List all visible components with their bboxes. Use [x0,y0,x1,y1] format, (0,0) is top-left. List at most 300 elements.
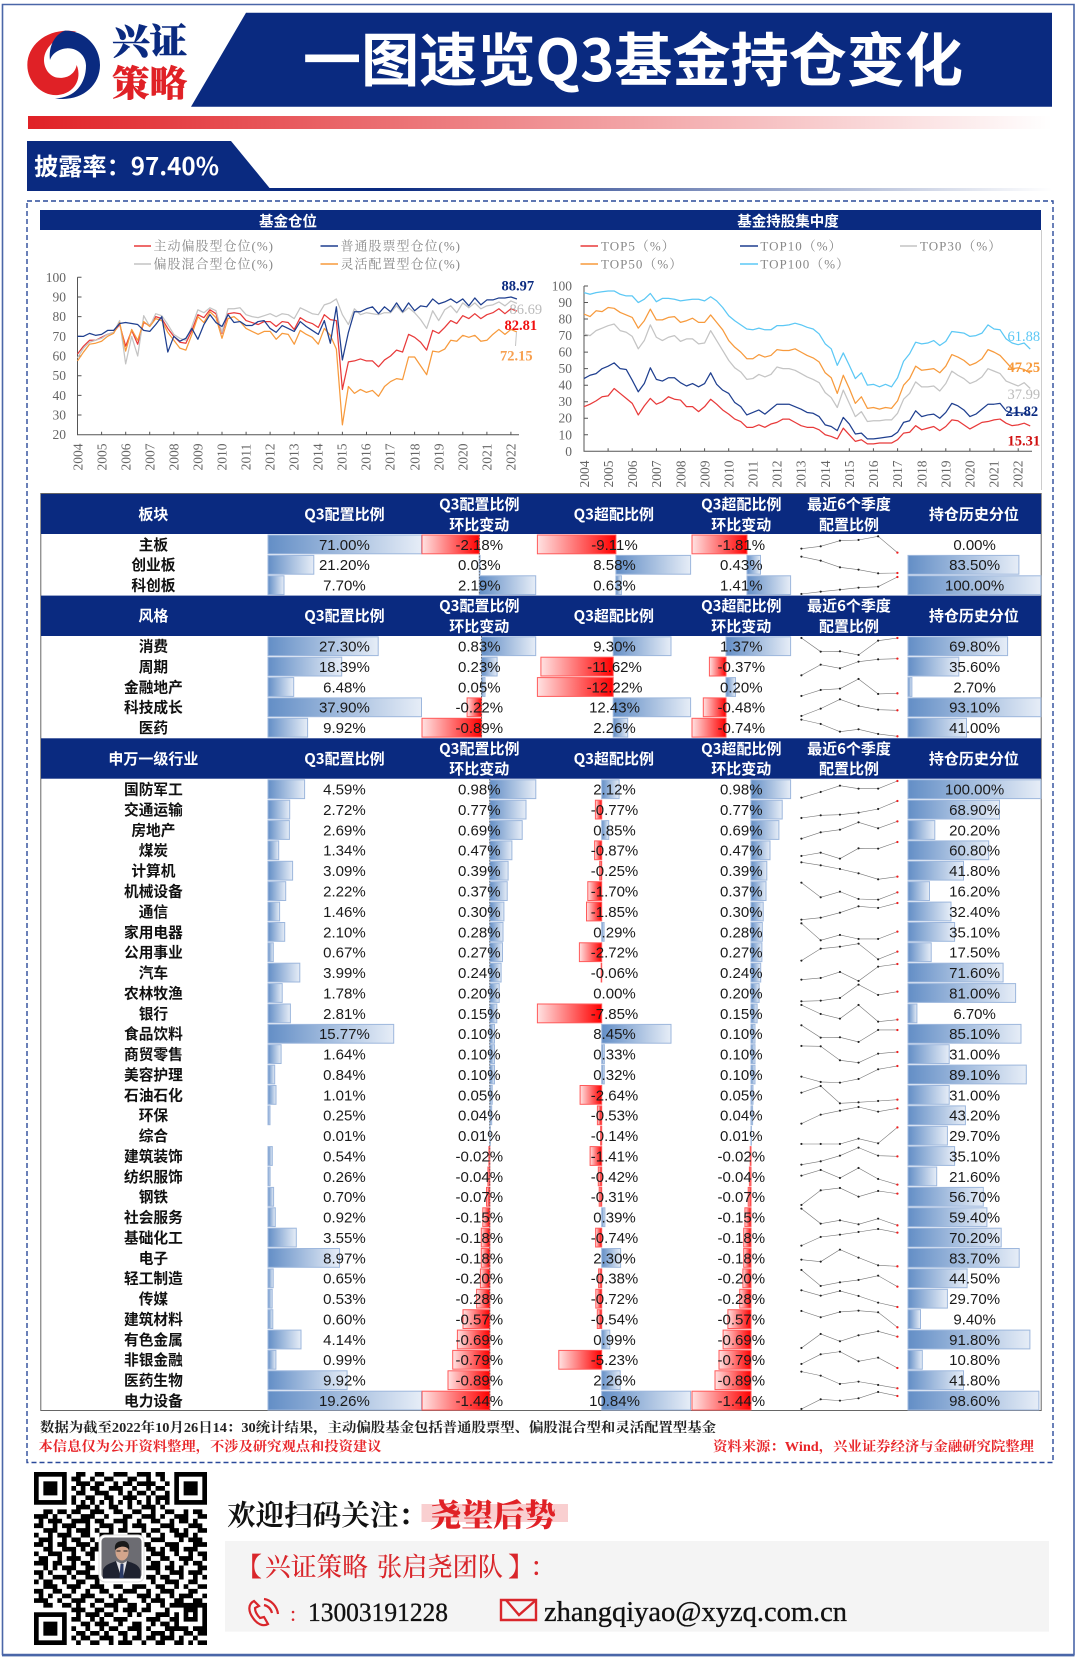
row: 通信: 32.40% [949,904,1000,921]
row: 美容护理: 89.10% [949,1067,1000,1084]
row: 消费: 1.37% [720,639,763,656]
axes: 2022 [504,444,518,470]
phone number: 13003191228 [308,1598,448,1627]
row: 综合: 29.70% [949,1128,1000,1145]
row: 主板 [139,534,996,555]
table header: 板块: Q3配置比例 [439,494,520,514]
axes: 2020 [456,443,470,470]
row: 机械设备: 2.22% [323,884,366,900]
table header: 板块: Q3配置比例 [304,504,385,524]
table header: 申万一级行业: 持仓历史分位 [929,748,1019,769]
row: 环保: 43.20% [949,1108,1000,1125]
team name: ： [530,1553,556,1582]
row: 基础化工: 基础化工 [124,1227,183,1248]
row: 钢铁: -0.07% [718,1189,765,1206]
row: 公用事业: 0.27% [458,945,501,962]
row: 建筑装饰: -1.41% [591,1148,638,1165]
row: 医药: 9.92% [323,720,366,737]
row: 农林牧渔: 81.00% [949,985,1000,1002]
row: 煤炭: 1.34% [323,843,366,860]
row: 美容护理: 美容护理 [124,1064,183,1085]
contact panel [225,1541,1049,1632]
row: 科技成长: -0.48% [718,700,765,717]
axes: 90 [558,295,572,310]
row: 计算机: 0.39% [720,863,763,880]
row: 医药 [139,717,1000,738]
row: 商贸零售: 商贸零售 [124,1044,183,1064]
axes: 2019 [432,443,446,470]
row: 房地产: 2.69% [323,822,366,839]
axes: 20 [52,427,66,442]
row: 通信 [139,901,1000,922]
row: 家用电器: 2.10% [323,924,366,941]
row: 钢铁: 56.70% [949,1189,1000,1206]
row: 消费: 27.30% [319,639,370,656]
row: 主板: -1.81% [718,537,765,554]
row: 环保 [139,1105,1000,1126]
row: 煤炭: 煤炭 [139,840,168,861]
axes: 2007 [142,443,158,470]
row: 食品饮料: 85.10% [949,1026,1000,1043]
row: 科创板: 0.63% [593,578,636,595]
row: 综合: 0.01% [720,1128,763,1145]
row: 环保: -0.53% [591,1108,638,1125]
row: 传媒 [139,1288,1000,1309]
row: 科创板: 100.00% [945,578,1004,595]
row: 食品饮料 [124,1023,1021,1044]
row: 家用电器 [124,921,1000,942]
row: 科技成长: 12.43% [589,700,640,717]
row: 非银金融: -5.23% [591,1352,638,1369]
row: 电力设备: 98.60% [949,1393,1000,1410]
disclosure line [27,188,1052,191]
icon: swirl logo [27,31,100,99]
row: 纺织服饰: -0.04% [456,1169,503,1186]
axes: 2011 [238,444,254,470]
axes: 2015 [334,443,350,470]
row: 有色金属 [124,1329,1030,1350]
row: 轻工制造: 44.50% [949,1271,1000,1288]
table header: 板块: 最近6个季度 [807,494,891,514]
row: 环保: 0.04% [720,1108,763,1125]
row: 创业板: 83.50% [949,557,1000,574]
row: 通信: 0.30% [458,904,501,921]
row: 创业板: 21.20% [319,557,370,574]
row: 银行: 2.81% [323,1006,366,1023]
row: 房地产 [131,819,1000,840]
row: 传媒: 29.70% [949,1291,1000,1308]
row: 银行: 银行 [139,1003,168,1024]
row: 传媒: -0.72% [591,1291,638,1308]
row: 创业板: 0.43% [720,557,763,574]
axes: 2004 [70,443,86,470]
row: 计算机: 计算机 [131,860,176,881]
row: 机械设备: 机械设备 [124,880,183,902]
row: 医药: 41.00% [949,720,1000,737]
table header: 风格: 持仓历史分位 [929,605,1019,626]
disclosure text: 披露率：97.40% [34,147,219,182]
row: 社会服务: -0.15% [456,1210,503,1227]
row: 传媒: -0.28% [456,1291,503,1308]
table header: 风格: Q3超配比例 [701,595,782,616]
row: 电子: 2.30% [593,1250,636,1267]
row: 金融地产: 2.70% [953,679,996,696]
row: 医药生物: 2.26% [593,1373,636,1390]
row: 科创板 [131,575,1041,596]
sparklines: 行业下半 [801,1086,897,1409]
row: 商贸零售: 0.10% [720,1046,763,1064]
team name: 张启尧团队 [377,1553,503,1582]
row: 电子: 83.70% [949,1250,1000,1267]
row: 金融地产: 金融地产 [124,676,183,697]
axes: 60 [52,348,66,364]
row: 科创板: 2.19% [458,578,501,595]
row: 钢铁: 钢铁 [139,1186,168,1207]
leader line [516,332,517,346]
row: 建筑材料: 0.60% [323,1312,366,1328]
sparklines: 板块 [801,536,897,594]
row: 石油石化: -2.64% [591,1087,638,1104]
QR code [34,1474,207,1643]
axes: 0 [565,444,572,459]
axes: 40 [558,378,572,393]
axes: 2011 [746,461,760,487]
row: 国防军工: 0.98% [720,782,763,799]
colon: : [290,1601,296,1626]
disclosure rate [27,141,1052,191]
row: 公用事业: 17.50% [949,945,1000,962]
row: 公用事业: 0.27% [720,945,763,962]
sparklines: 风格 [801,638,897,736]
row: 汽车: 0.24% [458,965,501,982]
axes: 70 [558,328,572,343]
row: 社会服务 [124,1207,1000,1228]
table header: 申万一级行业 [41,738,1041,779]
row: 煤炭: 0.47% [720,843,763,860]
row: 通信: 通信 [139,901,168,922]
axes: 100 [552,278,572,294]
row: 医药: 医药 [139,717,168,738]
row: 通信: -1.85% [591,904,638,921]
QR modules [34,1474,207,1643]
table [41,494,1041,1411]
row: 商贸零售: 31.00% [949,1046,1000,1064]
row: 煤炭 [139,840,1000,861]
highlight [422,1504,568,1522]
row: 石油石化: 0.05% [720,1087,763,1104]
table header: 申万一级行业: 环比变动 [711,758,771,779]
row: 非银金融: -0.79% [456,1352,503,1369]
axes [552,278,1032,488]
row: 汽车: -0.06% [591,965,638,982]
row: 公用事业 [124,942,1000,963]
table header: 风格: Q3配置比例 [304,605,385,626]
row: 钢铁: 0.70% [323,1189,366,1206]
data note: 数据为截至2022年10月26日14：30统计结果，主动偏股基金包括普通股票型、偏股混合型和灵活配置型基金 [40,1419,717,1436]
bottom border shadow [2,1654,1074,1656]
row: 电子: -0.18% [456,1250,503,1267]
row: 纺织服饰 [124,1166,1000,1187]
disclaimer: 本信息仅为公开资料整理，不涉及研究观点和投资建议 [38,1438,382,1455]
table header: 板块 [41,494,1041,535]
row: 机械设备: -1.70% [591,884,638,900]
row: 建筑装饰: -0.02% [718,1148,765,1165]
prompt text: 欢迎扫码关注： [227,1500,427,1532]
axes: 2021 [480,444,494,470]
row: 创业板: 8.58% [593,557,636,574]
row: 计算机 [131,860,1000,881]
section bar [40,210,1041,230]
table header: 申万一级行业: 最近6个季度 [807,738,891,759]
row: 建筑装饰: 建筑装饰 [124,1145,183,1166]
row: 公用事业: -2.72% [591,945,638,962]
axes: 2018 [914,460,930,488]
row: 家用电器: 35.10% [949,924,1000,941]
dashed content frame [27,201,1053,1462]
row: 石油石化 [124,1084,1000,1105]
row: 科技成长: 37.90% [319,700,370,717]
line chart: 基金持股集中度 [552,238,1040,488]
legend: TOP5（%） [601,238,676,254]
row: 周期: -11.62% [587,659,642,676]
row: 有色金属: -0.69% [456,1332,503,1349]
title banner [191,13,1052,107]
end labels [500,278,542,364]
row: 食品饮料: 食品饮料 [124,1023,183,1044]
row: 基础化工 [124,1227,1001,1248]
row: 建筑装饰: 35.10% [949,1148,1000,1165]
legend [134,238,461,272]
table header: 风格: 风格 [138,605,168,626]
row: 建筑装饰 [124,1145,1000,1166]
row: 传媒: 0.53% [323,1291,366,1308]
table header: 板块: 配置比例 [819,514,879,535]
axes: 50 [52,368,66,383]
row: 消费: 0.83% [458,639,501,656]
row: 农林牧渔 [124,982,1016,1003]
row: 基础化工: -0.18% [456,1230,503,1247]
row: 国防军工: 2.12% [593,782,636,799]
row: 主板: -9.11% [591,537,638,554]
axes: 2020 [962,460,978,488]
row: 消费: 消费 [139,636,168,657]
row: 商贸零售: 1.64% [323,1046,366,1064]
legend: TOP100（%） [760,256,850,272]
row: 轻工制造: 轻工制造 [124,1268,183,1289]
axes: 2022 [1010,460,1026,488]
row: 建筑材料: -0.57% [718,1312,765,1328]
row: 基础化工: 3.55% [323,1230,366,1247]
axes: 100 [46,270,66,285]
table header: 风格: 环比变动 [711,615,771,636]
logo [27,22,187,104]
row: 房地产: 0.69% [720,822,763,839]
row: 电力设备 [124,1390,1039,1411]
row: 房地产: 房地产 [131,819,175,840]
row: 家用电器: 家用电器 [124,921,183,942]
row: 农林牧渔: 1.78% [323,985,366,1002]
row: 汽车: 0.24% [720,965,763,982]
axes: 2012 [770,460,784,488]
row: 美容护理: 0.32% [593,1067,636,1084]
row: 银行: -7.85% [591,1006,638,1023]
row: 电力设备: -1.44% [456,1393,503,1410]
row: 周期 [139,656,1000,677]
row: 计算机: 3.09% [323,863,366,880]
row: 轻工制造: -0.38% [591,1271,638,1288]
axes: 2010 [722,460,736,488]
row: 医药生物 [124,1370,1000,1391]
table header: 板块: Q3超配比例 [574,504,654,524]
row: 金融地产: -12.22% [587,679,642,696]
row: 消费: 9.30% [593,639,636,656]
row: 传媒: -0.28% [718,1291,765,1308]
axes: 2018 [408,443,422,470]
end labels: 88.97 [502,278,534,294]
icon: mail [501,1600,536,1620]
table header: 板块: Q3超配比例 [701,494,782,514]
table header: 板块: 环比变动 [711,514,771,535]
heading: 基金仓位: 基金仓位 [259,211,317,232]
row: 有色金属: 0.99% [593,1332,636,1349]
row: 商贸零售: 0.33% [593,1046,636,1064]
end labels: 47.25 [1008,360,1040,376]
row: 电子: 电子 [139,1247,168,1268]
end labels: 61.88 [1008,329,1040,345]
row: 有色金属: -0.69% [718,1332,765,1349]
row: 医药: -0.74% [718,720,765,737]
row: 商贸零售: 0.10% [458,1046,501,1064]
row: 石油石化: 0.05% [458,1087,501,1104]
table header: 申万一级行业: Q3超配比例 [574,748,654,769]
axes: 2008 [166,443,182,470]
team name: 【 [236,1553,262,1582]
title: 一图速览Q3基金持仓变化 [303,14,963,98]
table header: 风格: 环比变动 [449,615,509,636]
row: 电力设备: 电力设备 [124,1390,183,1411]
team name: 兴证策略 [265,1553,368,1582]
row: 社会服务: 0.39% [593,1210,636,1227]
row: 周期: 18.39% [319,659,370,676]
row: 美容护理 [124,1064,1026,1085]
row: 煤炭: 0.47% [458,843,501,860]
row: 科创板: 7.70% [323,578,366,595]
axes: 2009 [190,443,206,470]
row: 房地产: 0.69% [458,822,501,839]
end labels: 15.31 [1008,434,1040,450]
row: 农林牧渔: 农林牧渔 [124,982,183,1003]
row: 纺织服饰: -0.04% [718,1169,765,1186]
row: 综合: -0.14% [591,1128,638,1145]
row: 非银金融 [124,1349,1000,1370]
heading: 基金持股集中度: 基金持股集中度 [737,211,839,232]
row: 电子 [139,1247,1019,1268]
row: 纺织服饰: 纺织服饰 [124,1166,183,1187]
axes: 2004 [577,460,592,488]
axes: 2007 [649,460,664,488]
row: 农林牧渔: 0.00% [593,985,636,1002]
row: 非银金融: 0.99% [323,1352,366,1369]
row: 建筑材料 [124,1308,996,1330]
row: 煤炭: -0.87% [591,843,638,860]
row: 电力设备: 10.84% [589,1393,640,1410]
row: 食品饮料: 0.10% [458,1026,501,1043]
row: 交通运输: 0.77% [458,802,501,819]
axes: 2014 [818,460,833,488]
row: 科创板: 1.41% [720,578,763,595]
row: 公用事业: 0.67% [323,945,366,962]
data lines [584,291,1030,444]
row: 石油石化: 31.00% [949,1087,1000,1104]
row: 家用电器: 0.29% [593,924,636,941]
row: 有色金属: 91.80% [949,1332,1000,1349]
axes: 30 [558,394,572,409]
row: 食品饮料: 0.10% [720,1026,763,1043]
row: 轻工制造: -0.20% [456,1271,503,1288]
row: 机械设备 [124,880,1000,902]
row: 交通运输: 交通运输 [124,799,183,820]
row: 房地产: 20.20% [949,822,1000,839]
row: 周期: 0.23% [458,659,501,676]
legend: TOP50（%） [601,256,683,272]
row: 汽车: 汽车 [139,962,168,983]
row: 基础化工: -0.18% [718,1230,765,1247]
legend: TOP10（%） [760,238,843,254]
row: 机械设备: 16.20% [949,884,1000,900]
row: 交通运输 [124,799,1000,820]
header [27,13,1052,129]
row: 钢铁: -0.31% [591,1189,638,1206]
row: 食品饮料: 8.45% [593,1026,636,1043]
row: 周期: 周期 [139,656,168,677]
axes: 60 [558,345,572,360]
axes: 2005 [601,460,616,488]
row: 农林牧渔: 0.20% [720,985,763,1002]
axes: 80 [558,312,572,326]
axes: 30 [52,408,66,422]
axes: 2017 [382,443,398,470]
row: 交通运输: 68.90% [949,802,1000,819]
table header: 板块: 板块 [138,504,168,524]
logo text [112,22,187,104]
row: 主板: 71.00% [319,537,370,554]
row: 非银金融: 非银金融 [124,1349,183,1370]
row: 纺织服饰: 21.60% [949,1169,1000,1186]
row: 非银金融: -0.79% [718,1352,765,1369]
end labels [1006,329,1040,450]
end labels: 82.81 [504,318,537,334]
axes: 2005 [94,443,110,470]
axes [46,270,519,470]
email: zhangqiyao@xyzq.com.cn [544,1597,847,1628]
axes: 2008 [674,460,688,488]
table header: 风格 [41,595,1041,636]
row: 医药生物: 医药生物 [124,1370,183,1391]
row: 基础化工: -0.74% [591,1230,638,1247]
end labels: 37.99 [1008,387,1040,403]
row: 主板: 主板 [139,534,168,555]
row: 基础化工: 70.20% [949,1230,1000,1247]
row: 建筑材料: -0.57% [456,1312,503,1328]
row: 医药: -0.89% [456,720,503,737]
team name: 】 [508,1553,534,1582]
red gradient rule [28,116,1052,129]
axes: 2017 [890,460,905,488]
axes: 20 [558,411,572,426]
logo text: 兴证 [112,22,187,62]
table header: 风格: 最近6个季度 [807,595,891,616]
axis lines [479,535,490,1410]
